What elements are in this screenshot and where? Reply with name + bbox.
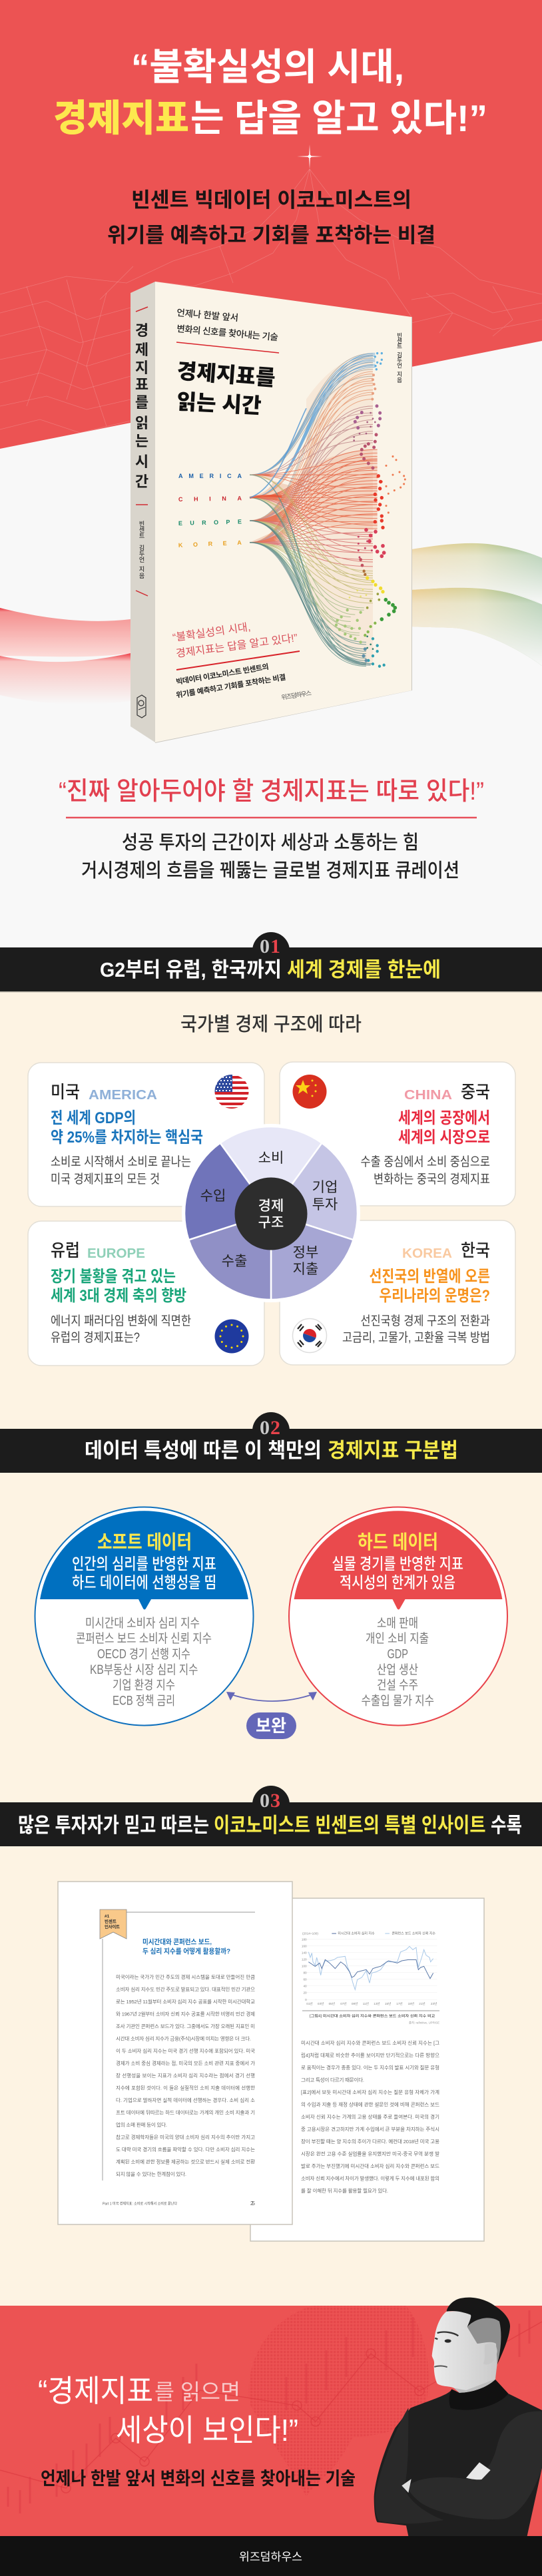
book spine: 음	[139, 573, 144, 579]
page footer: Part 1 미국 경제지표: 소비로 시작해서 소비로 끝난다	[103, 2201, 177, 2206]
right page body text: 소비자 신뢰 지수에서 차이가 발생했다. 이렇게 두 지수에 내포된 함의	[301, 2175, 439, 2181]
line chart: 출처: rafinitive, UPRISE	[409, 2020, 439, 2025]
panel: Europe: 유럽의 경제지표는?	[51, 1330, 140, 1345]
book tagline: 언제나 한발 앞서	[176, 308, 239, 323]
country labels	[178, 473, 242, 549]
closing quote: “경제지표	[38, 2374, 153, 2408]
panel: left book page	[58, 1882, 292, 2224]
book spine: 지	[139, 566, 144, 573]
pie labels: 기업	[312, 1180, 338, 1195]
line chart: (2014=100)	[302, 1932, 318, 1935]
icon: EU flag	[214, 1320, 249, 1353]
panel: Korea: 선진국의 반열에 오른	[369, 1268, 490, 1286]
book	[131, 282, 412, 743]
soft data list: 기업 환경 지수	[113, 1678, 175, 1692]
book quote: 경제지표는 답을 알고 있다!”	[175, 632, 298, 660]
line chart: 05년	[329, 2001, 335, 2005]
panel: Europe: 에너지 패러다임 변화에 직면한	[51, 1314, 191, 1328]
book spine: 는	[135, 433, 148, 449]
pie hub	[234, 1177, 308, 1250]
panel: China: 세계의 시장으로	[398, 1129, 490, 1147]
line chart: 23년	[431, 2001, 437, 2005]
book spine: 김	[139, 544, 144, 551]
closing quote: 를 읽으면	[154, 2380, 240, 2404]
hand and cuff	[466, 2462, 491, 2479]
tagline description: 성공 투자의 근간이자 세상과 소통하는 힘	[122, 832, 419, 854]
right page body text: 의 수입과 지출 등 재정 상태에 관한 설문인 것에 비해 콘퍼런스 보드	[301, 2101, 439, 2108]
line chart: 140	[302, 1951, 307, 1954]
country labels: KOREA	[178, 539, 242, 549]
author portrait	[374, 2298, 542, 2536]
line chart	[302, 1932, 439, 2025]
page heading	[142, 1937, 230, 1955]
book author: 센	[397, 338, 402, 344]
section 03 header	[0, 1786, 542, 1846]
cream background	[0, 991, 542, 2306]
right page body text: 를 잘 이해한 뒤 지수를 활용할 필요가 있다.	[301, 2187, 388, 2194]
panel: Korea	[280, 1220, 515, 1365]
soft data list: 미시간대 소비자 심리 지수	[85, 1616, 200, 1631]
page heading: 두 심리 지수를 어떻게 활용할까?	[142, 1947, 230, 1955]
book publisher: 위즈덤하우스	[281, 689, 312, 702]
left page body text: 업의 소매 판매 등이 있다.	[116, 2121, 167, 2128]
panel: Europe: EUROPE	[87, 1246, 145, 1261]
section 02 header: 2	[270, 1417, 280, 1439]
globe and chart background	[0, 2306, 542, 2513]
ear	[483, 2343, 497, 2364]
book spine: 두	[139, 551, 144, 557]
left page body text: 계획된 소비에 관한 정보를 제공하는 것으로 반드시 실제 소비로 전환	[116, 2159, 255, 2165]
line chart: 120	[302, 1957, 307, 1961]
page heading: 미시간대와 콘퍼런스 보드,	[142, 1937, 212, 1946]
panel: hard data: 적시성의 한계가 있음	[340, 1574, 455, 1592]
book quote: “불확실성의 시대,	[172, 621, 251, 644]
country labels: CHINA	[178, 495, 242, 503]
pie labels: 수입	[200, 1188, 226, 1204]
hard data list: 건설 수주	[377, 1678, 418, 1692]
book author: 두	[397, 357, 402, 364]
left page body text: 미국이라는 국가가 민간 주도의 경제 시스템을 토대로 만들어진 만큼	[116, 1973, 255, 1980]
panel: China: CHINA	[404, 1088, 452, 1103]
book spine: 표	[135, 376, 148, 393]
line chart: 콘퍼런스 보드 소비자 신뢰 지수	[392, 1932, 435, 1936]
section 02 header: 경제지표 구분법	[328, 1439, 458, 1462]
line chart: 20	[303, 1991, 307, 1994]
headline: 는 답을 알고 있다!”	[190, 97, 487, 139]
closing quote: 세상이 보인다!”	[116, 2413, 298, 2447]
insight ribbon: 인사이트	[105, 1924, 120, 1930]
closing subtitle: 언제나 한발 앞서 변화의 신호를 찾아내는 기술	[41, 2469, 356, 2489]
panel: America: 미국 경제지표의 모든 것	[51, 1172, 160, 1186]
panel: right book page	[250, 1898, 484, 2241]
subtitle: 빈센트 빅데이터 이코노미스트의	[131, 188, 411, 212]
panel: Korea: 우리나라의 운명은?	[380, 1287, 490, 1305]
right page body text: 중 고용시장은 견고하지만 가계 수입에서 큰 부분을 차지하는 주식시	[301, 2125, 439, 2132]
arrow: complement	[226, 1692, 317, 1701]
panel: China: 변화하는 중국의 경제지표	[374, 1172, 490, 1186]
line chart: 60	[303, 1977, 307, 1981]
book spine: 경	[135, 322, 148, 339]
book author: 언	[397, 362, 402, 369]
section 01 header: G2부터 유럽, 한국까지	[100, 958, 282, 981]
soft data list: 콘퍼런스 보드 소비자 신뢰 지수	[76, 1631, 212, 1646]
panel: hard data: 실물 경기를 반영한 지표	[332, 1555, 463, 1573]
section 03 header: 이코노미스트 빈센트의 특별 인사이트	[214, 1814, 486, 1837]
pie labels: 구조	[258, 1215, 284, 1230]
label: 보완: 보완	[256, 1716, 286, 1736]
pie labels: 수출	[222, 1254, 247, 1269]
icon: China flag	[293, 1075, 326, 1109]
book title	[176, 359, 276, 418]
line chart: 07년	[340, 2001, 347, 2005]
red hero background	[0, 0, 542, 449]
page background	[0, 0, 542, 947]
book quote	[172, 621, 298, 660]
icon: Korea flag	[293, 1318, 326, 1353]
right page body text: 시장은 완전 고용 수준 실업률을 유지했지만 미국-중국 무역 분쟁 발	[301, 2151, 439, 2157]
line chart: 40	[303, 1984, 307, 1987]
panel: soft data: 하드 데이터에 선행성을 띰	[72, 1574, 216, 1592]
hard data list: 개인 소비 지출	[366, 1631, 429, 1646]
book author: 김	[397, 352, 402, 358]
hard data list	[361, 1616, 434, 1708]
hard data list: GDP	[388, 1647, 408, 1662]
book spine: 센	[139, 527, 144, 533]
book spine: 빈	[139, 520, 144, 527]
line chart: 180	[302, 1937, 307, 1941]
book spine	[131, 282, 155, 742]
right page body text: 미시간대 소비자 심리 지수와 콘퍼런스 보드 소비자 신뢰 지수는 [그	[301, 2039, 439, 2046]
section 03 header: 3	[270, 1790, 280, 1812]
headline: 경제지표	[53, 97, 189, 139]
left page body text	[116, 1973, 255, 2177]
line chart: 13년	[374, 2001, 380, 2005]
footer bar	[0, 2536, 542, 2576]
closing red panel	[0, 2306, 542, 2536]
panel: China: 수출 중심에서 소비 중심으로	[361, 1155, 490, 1169]
pie chart: economic structure	[182, 1124, 360, 1302]
section 02 header	[0, 1412, 542, 1473]
right page body text: 발로 주가는 부진했기에 미시간대 소비자 심리 지수와 콘퍼런스 보드	[301, 2163, 439, 2169]
panel: Europe: 장기 불황을 겪고 있는	[51, 1268, 176, 1286]
panel: America: 약 25%를 차지하는 핵심국	[51, 1129, 203, 1147]
book title: 읽는 시간	[176, 389, 262, 418]
book blurb: 빅데이터 이코노미스트 빈센트의	[175, 662, 270, 686]
panel: China: 중국	[461, 1082, 490, 1102]
left page body text: 장 선행성을 보이는 지표가 소비자 심리 지수라는 점에서 경기 선행	[116, 2072, 255, 2079]
ribbon: right green	[411, 543, 542, 666]
book spine: 지	[135, 360, 148, 376]
book spine: 간	[135, 473, 148, 490]
panel: soft data: 인간의 심리를 반영한 지표	[72, 1555, 216, 1573]
book blurb: 위기를 예측하고 기회를 포착하는 비결	[175, 672, 286, 700]
sweater	[374, 2379, 542, 2536]
hard data list: 산업 생산	[377, 1663, 418, 1677]
left page body text: 로는 1952년 11월부터 소비자 심리 지수 공표를 시작한 미시간대학교	[116, 1998, 255, 2005]
section 03 header: 많은 투자자가 믿고 따르는	[18, 1814, 209, 1837]
line chart: 11년	[363, 2001, 369, 2005]
pie labels	[200, 1151, 338, 1277]
line chart: [그림4] 미시간대 소비자 심리 지수와 콘퍼런스 보드 소비자 신뢰 지수 비교	[310, 2013, 435, 2019]
footer bar: 위즈덤하우스	[239, 2551, 302, 2563]
right page body text	[301, 2039, 439, 2194]
panel: Europe	[28, 1221, 264, 1366]
line chart: 0	[305, 1998, 307, 2001]
left page body text: 도 대략 미국 경기의 흐름을 파악할 수 있다. 다만 소비자 심리 지수는	[116, 2146, 255, 2153]
shaved side hair	[467, 2316, 503, 2364]
pie labels: 지출	[293, 1262, 318, 1277]
panel: America: 소비로 시작해서 소비로 끝나는	[51, 1155, 191, 1169]
panel: Korea: 고금리, 고물가, 고환율 극복 방법	[342, 1330, 490, 1345]
ribbon: left red	[0, 608, 131, 704]
headline	[53, 46, 487, 139]
line chart: 03년	[318, 2001, 324, 2005]
country labels: AMERICA	[178, 473, 242, 479]
face	[432, 2310, 508, 2390]
pie labels: 정부	[293, 1245, 318, 1260]
book spine: 를	[135, 394, 148, 411]
soft data list: KB부동산 시장 심리 지수	[90, 1663, 198, 1677]
left page body text: 소비자 심리 지수도 민간 주도로 발표되고 있다. 대표적인 민간 기관으	[116, 1985, 255, 1992]
section 01 header: 0	[260, 935, 270, 957]
left page body text: 이 두 소비자 심리 지수는 미국 경기 선행 지수에 포함되어 있다. 미국	[116, 2047, 255, 2054]
book tagline: 변화의 신호를 찾아내는 기술	[176, 324, 278, 342]
sector: 소비	[220, 1127, 322, 1213]
book blurb	[175, 662, 286, 700]
book spine: 읽	[135, 415, 148, 431]
panel: Europe: 유럽	[51, 1240, 80, 1260]
book author: 빈	[397, 332, 402, 339]
page footer: 25	[250, 2200, 256, 2206]
tagline description	[81, 832, 459, 882]
sector: 수출	[188, 1213, 271, 1300]
panel: America: AMERICA	[89, 1088, 157, 1103]
label: 보완	[246, 1712, 296, 1739]
turtleneck collar	[449, 2380, 508, 2410]
panel: soft data: 소프트 데이터	[97, 1531, 192, 1553]
book author: 지	[397, 371, 402, 378]
mesh pattern	[0, 169, 542, 433]
line chart: 160	[302, 1944, 307, 1947]
subtitle	[107, 188, 435, 247]
left page body text: 경제가 소비 중심 경제라는 점, 미국의 모든 소비 관련 지표 중에서 가	[116, 2060, 255, 2067]
hard data list: 소매 판매	[377, 1616, 418, 1631]
pie labels: 투자	[312, 1197, 338, 1212]
book tagline	[176, 308, 278, 342]
book spine: 제	[135, 342, 148, 358]
line chart: 100	[302, 1964, 307, 1967]
panel: hard data	[289, 1507, 507, 1726]
pie labels: 경제	[258, 1198, 284, 1214]
insight ribbon: #1	[105, 1914, 110, 1919]
panel: America	[28, 1063, 264, 1206]
facial features	[435, 2332, 458, 2339]
tagline quote: “진짜 알아두어야 할 경제지표는 따로 있다!”	[59, 778, 484, 806]
book cover	[155, 282, 411, 742]
panel: China	[280, 1062, 515, 1206]
hair	[447, 2298, 510, 2365]
panel: Europe: 세계 3대 경제 축의 향방	[51, 1287, 186, 1305]
left page body text: 조사 기관인 콘퍼런스 보드가 있다. 그중에서도 가장 오래된 지표인 미	[116, 2023, 255, 2029]
line chart: 01년	[306, 2001, 313, 2005]
section 01 header: 세계 경제를 한눈에	[287, 958, 441, 981]
line chart: 미시간대 소비자 심리 지수	[338, 1932, 375, 1936]
panel: Korea: 한국	[461, 1240, 490, 1260]
book author: 음	[397, 377, 402, 384]
line chart: 17년	[396, 2001, 403, 2005]
sector: 수입	[184, 1143, 271, 1240]
headline: “불확실성의 시대,	[131, 46, 404, 88]
section 01 header: 1	[270, 935, 280, 957]
soft data list	[76, 1616, 212, 1708]
left page body text: 시간대 소비자 심리 지수가 금융(주식)시장에 미치는 영향은 더 크다.	[116, 2035, 251, 2041]
right page body text: 그리고 특성이 다르기 때문이다.	[301, 2076, 364, 2083]
book author: 트	[397, 343, 402, 350]
line chart: 80	[303, 1971, 307, 1974]
panel: hard data: 하드 데이터	[358, 1531, 438, 1553]
insight ribbon: 빈센트	[105, 1918, 117, 1924]
left page body text: 되지 않을 수 있다는 한계점이 있다.	[116, 2171, 186, 2177]
line chart: 21년	[419, 2001, 425, 2005]
book title: 경제지표를	[176, 359, 276, 390]
sector: 정부지출	[271, 1213, 354, 1300]
left page body text: 다. 기업으로 말하자면 실적 데이터에 선행하는 경우다. 소비 심리 소	[116, 2097, 255, 2103]
right page body text: [표2]에서 보듯 미시간대 소비자 심리 지수는 질문 유형 자체가 가계	[301, 2089, 439, 2095]
panel: Korea: 선진국형 경제 구조의 전환과	[361, 1314, 490, 1328]
right page body text: 림4]처럼 대체로 비슷한 추이를 보이지만 단기적으로는 다른 방향으	[301, 2052, 439, 2059]
section 03 header: 수록	[491, 1814, 522, 1837]
panel: Korea: KOREA	[402, 1246, 452, 1261]
sector: 기업투자	[271, 1143, 358, 1240]
panel: America: 전 세계 GDP의	[51, 1109, 136, 1127]
panel: America: 미국	[51, 1082, 80, 1102]
right page body text: 로 움직이는 경우가 종종 있다. 이는 두 지수의 발표 시기와 질문 유형	[301, 2064, 439, 2071]
book spine: 언	[139, 556, 144, 563]
soft data list: ECB 정책 금리	[113, 1694, 175, 1708]
icon: US flag	[214, 1074, 249, 1110]
neck	[454, 2364, 497, 2393]
pie labels: 소비	[258, 1151, 284, 1166]
country labels: EUROPE	[178, 519, 242, 527]
panel: soft data	[35, 1507, 253, 1726]
hard data list: 수출입 물가 지수	[361, 1694, 434, 1708]
subtitle: 위기를 예측하고 기회를 포착하는 비결	[107, 224, 435, 247]
flow graphic	[250, 354, 405, 666]
book spine: 시	[135, 453, 148, 470]
section 01 heading: 국가별 경제 구조에 따라	[180, 1013, 362, 1035]
section 01 header	[0, 932, 542, 992]
book spine: 트	[139, 533, 144, 539]
line chart: 09년	[352, 2001, 358, 2005]
right page body text: 장이 부진할 때는 양 지수의 추이가 다르다. 예컨대 2018년 미국 고용	[301, 2138, 439, 2145]
left page body text: 참고로 경제학자들은 미국의 양대 소비자 심리 지수의 추이만 가지고	[116, 2133, 255, 2140]
section 02 header: 데이터 특성에 따른 이 책만의	[85, 1439, 322, 1462]
left page body text: 프트 데이터에 뒤따르는 하드 데이터로는 가계의 개인 소비 지출과 기	[116, 2109, 255, 2116]
line chart: 15년	[385, 2001, 391, 2005]
left page body text: 와 1967년 2월부터 소비자 신뢰 지수 공표를 시작한 비영리 민간 경제	[116, 2011, 255, 2017]
left page body text: 지수에 포함된 것이다. 이 들은 실질적인 소비 지출 데이터에 선행한	[116, 2084, 255, 2091]
tagline description: 거시경제의 흐름을 꿰뚫는 글로벌 경제지표 큐레이션	[81, 860, 459, 882]
section 02 header: 0	[260, 1417, 270, 1439]
section 03 header: 0	[260, 1790, 270, 1812]
icon: sparkle star	[297, 144, 322, 169]
panel: China: 세계의 공장에서	[398, 1109, 490, 1127]
insight ribbon	[100, 1910, 127, 1939]
right page body text: 소비자 신뢰 지수는 가계의 고용 상태를 주로 들여본다. 미국의 경기	[301, 2113, 439, 2120]
line chart: 19년	[408, 2001, 414, 2005]
page footer	[103, 2200, 256, 2206]
closing quote	[38, 2374, 298, 2447]
soft data list: OECD 경기 선행 지수	[97, 1647, 190, 1662]
